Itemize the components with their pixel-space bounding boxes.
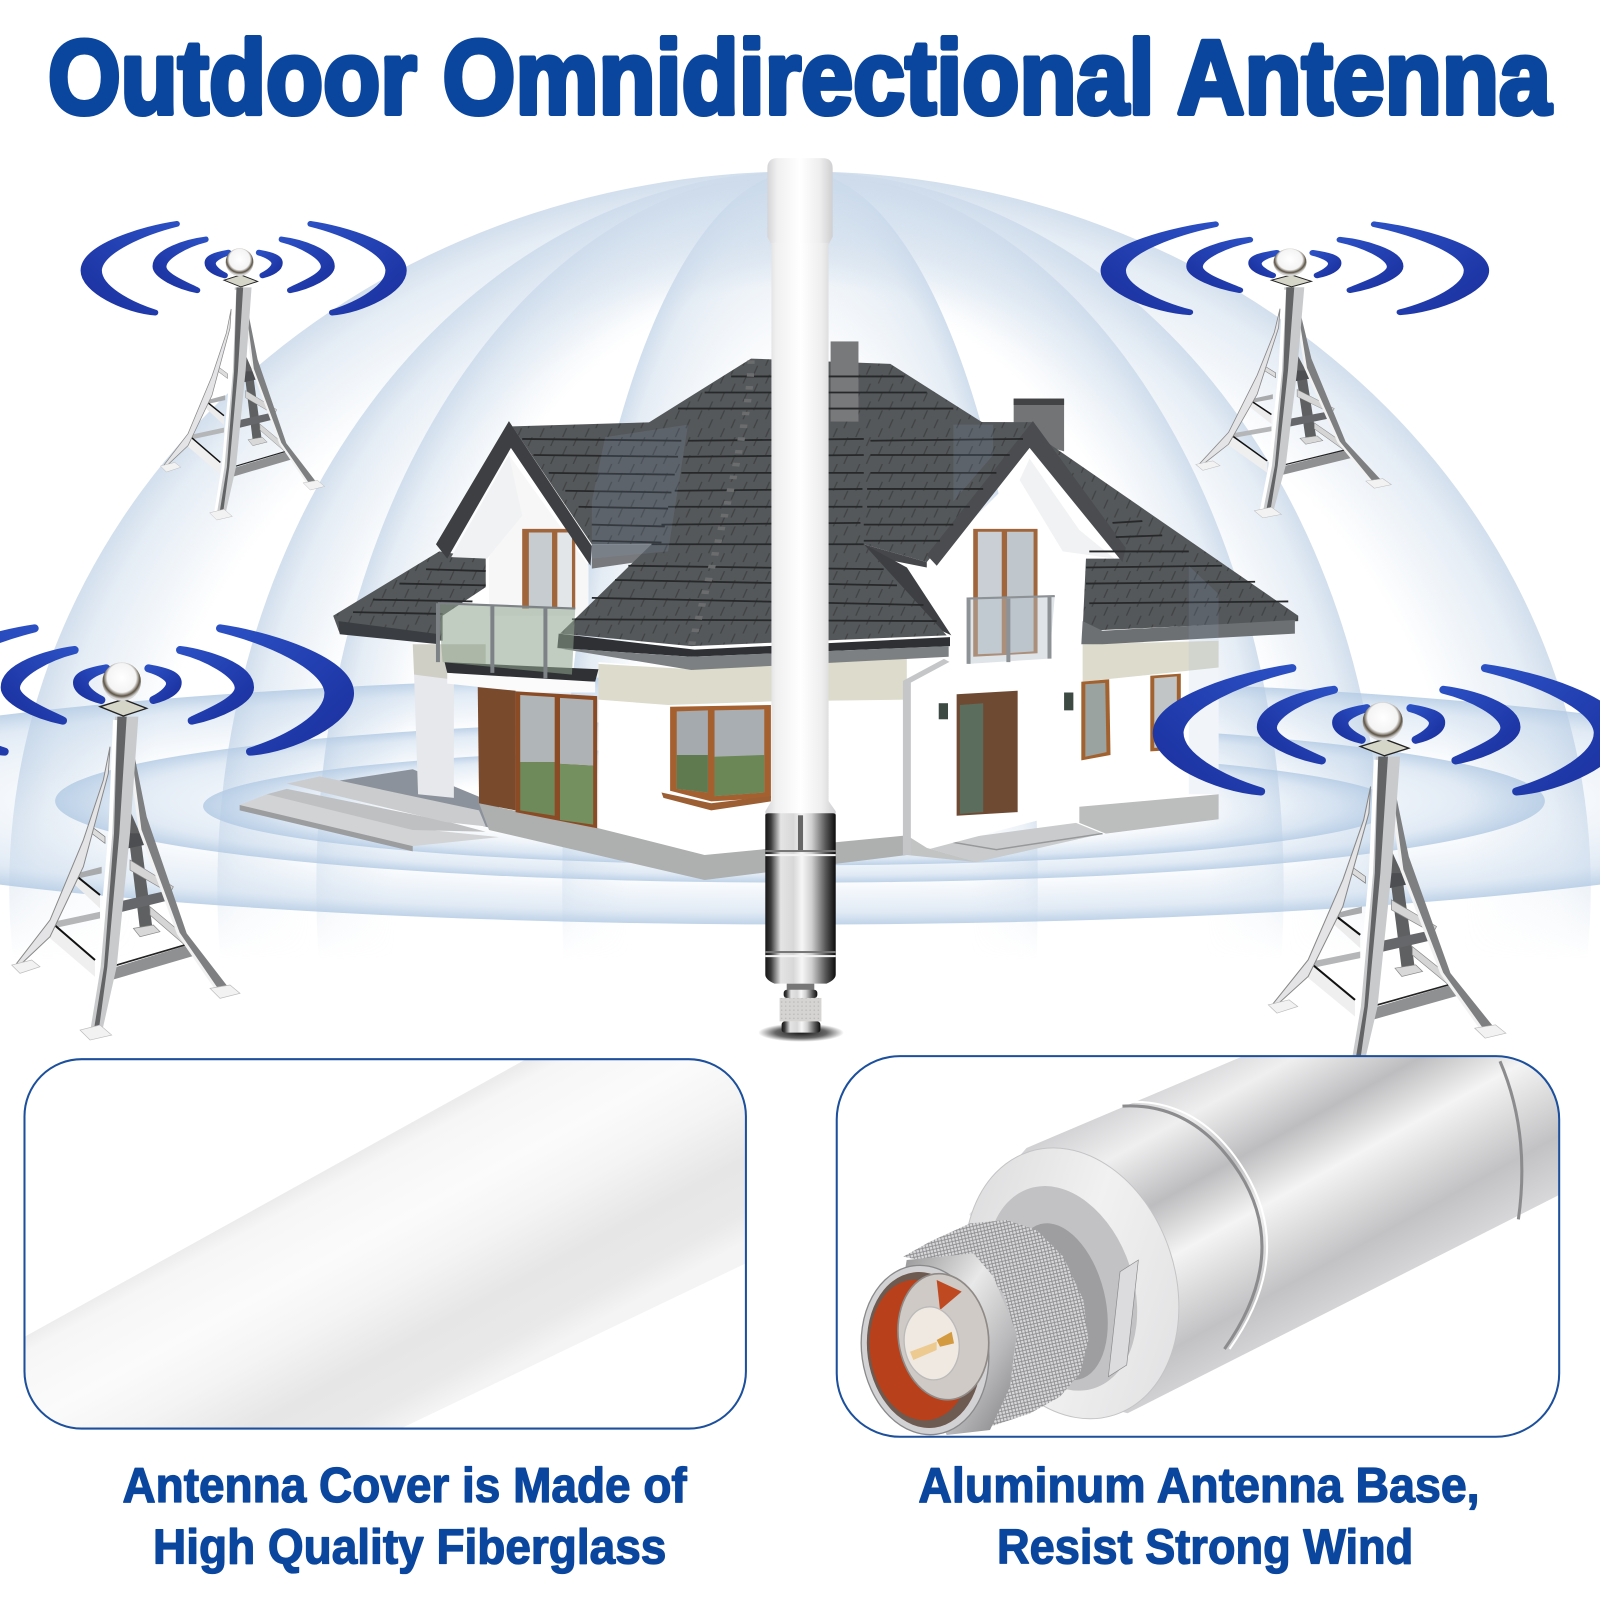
antenna aluminum base <box>765 813 836 984</box>
right balcony glass <box>967 596 1055 664</box>
cylinder grooves <box>1122 1061 1522 1349</box>
orange dielectric <box>870 1280 960 1420</box>
antenna shadow <box>758 1023 844 1042</box>
caption: fiberglass <box>122 1459 687 1574</box>
caption: fiberglass: Antenna Cover is Made of <box>122 1459 687 1513</box>
porch ground and steps <box>240 769 1103 862</box>
tower top-right <box>1104 224 1486 518</box>
panel: aluminum base <box>837 1051 1571 1447</box>
caption: aluminum: Resist Strong Wind <box>997 1520 1413 1574</box>
lower left wood panel and glass door <box>478 687 597 828</box>
caption: aluminum <box>918 1459 1480 1574</box>
signal floor rings <box>0 676 1600 924</box>
right wing windows <box>522 529 1181 760</box>
collar ring <box>995 1186 1138 1391</box>
metal cylinder <box>969 1051 1571 1413</box>
house walls <box>413 455 1219 880</box>
connector interior <box>866 1272 978 1428</box>
house <box>240 341 1298 880</box>
tower bottom-left <box>0 628 350 1040</box>
central antenna <box>758 158 844 1042</box>
front rim <box>860 1264 990 1436</box>
contact pin <box>910 1332 954 1360</box>
orange wedge <box>937 1280 962 1310</box>
blue signal tint over roof <box>592 425 1219 794</box>
caption: aluminum: Aluminum Antenna Base, <box>918 1459 1480 1513</box>
knurled nut <box>903 1220 1088 1427</box>
insulator <box>904 1306 960 1380</box>
antenna connector <box>780 984 821 1033</box>
threads <box>897 1272 990 1401</box>
right wing door and lamps <box>939 691 1073 816</box>
flange disc <box>968 1148 1180 1420</box>
caption: fiberglass: High Quality Fiberglass <box>153 1520 666 1574</box>
antenna fibreglass tube <box>765 243 836 815</box>
lower front window <box>661 705 771 810</box>
hex face <box>1108 1260 1138 1377</box>
tower bottom-right <box>1157 668 1600 1080</box>
antenna radome cap <box>767 158 833 245</box>
tower top-left <box>83 224 404 520</box>
downpipe <box>907 660 947 855</box>
panel: fiberglass cover <box>23 1058 747 1430</box>
neck <box>1032 1223 1108 1380</box>
signal dome lobes <box>9 172 1591 926</box>
nose sleeve <box>897 1253 1017 1435</box>
connector group <box>860 1148 1180 1436</box>
left balcony glass <box>438 603 575 678</box>
roof <box>333 341 1298 670</box>
